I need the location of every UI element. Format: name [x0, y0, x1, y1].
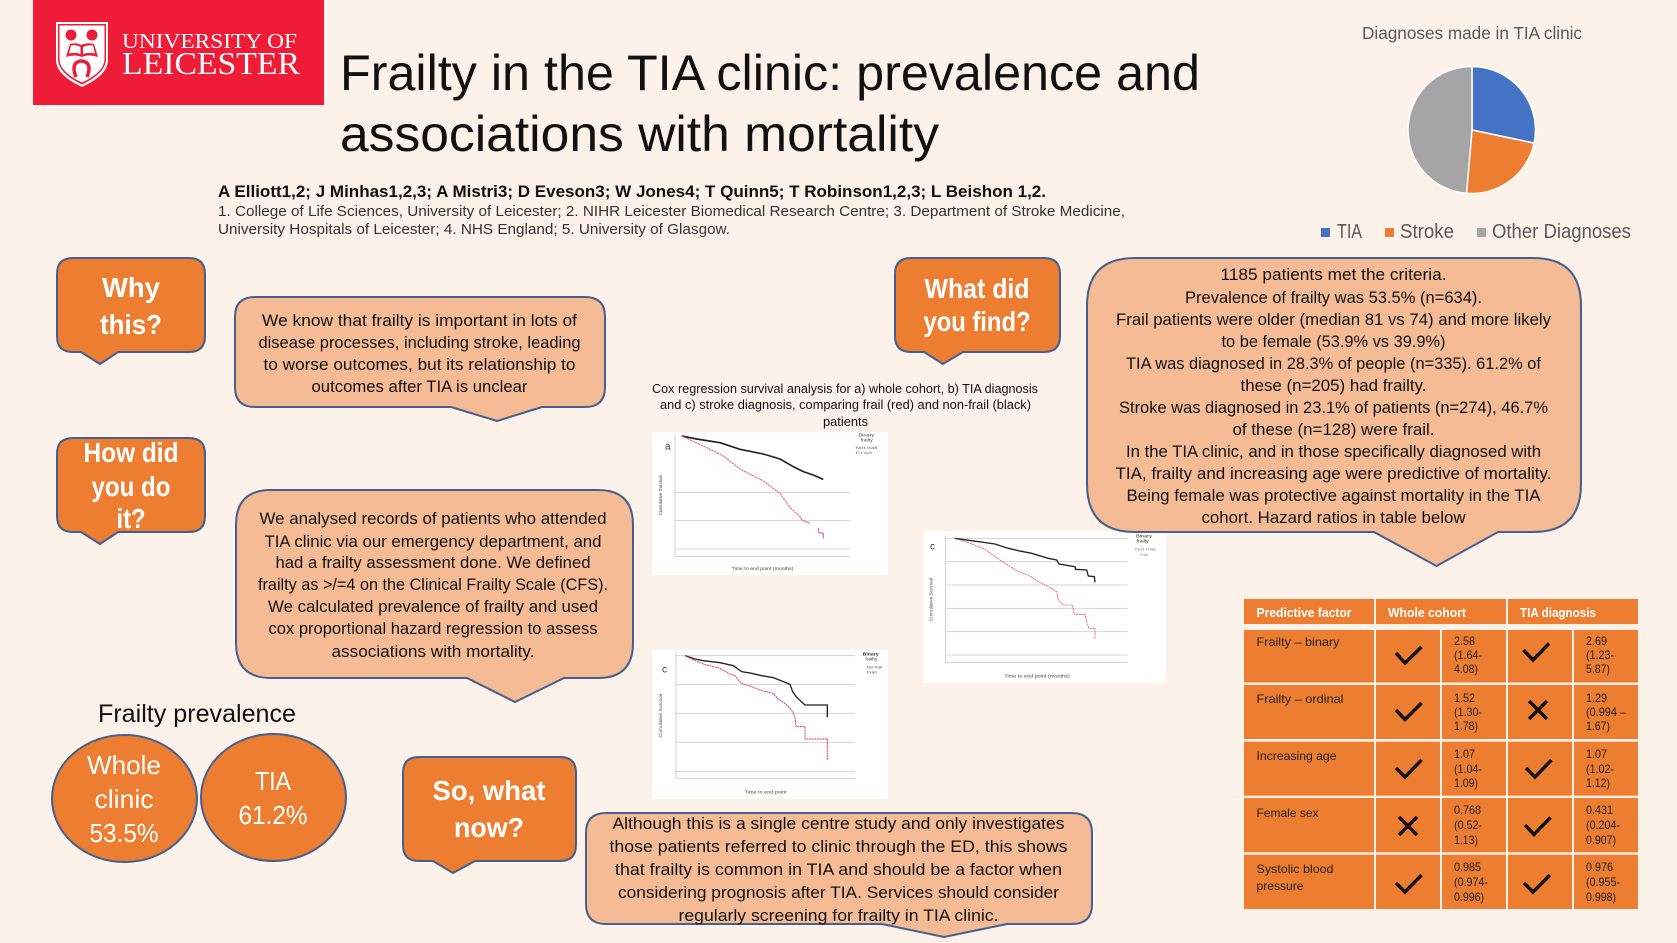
chart caption: Cox regression survival analysis for a) whole cohort, b) TIA diagnosis — [652, 381, 1038, 396]
survival chart a: whole cohort: Frail — [855, 450, 872, 455]
survival chart b: TIA diagnosis: Time to end point (months) — [1004, 673, 1070, 678]
callout heading: so what now — [403, 757, 576, 873]
survival chart a: whole cohort: frailty — [861, 438, 874, 443]
callout heading: how did you do it: you do — [92, 471, 170, 502]
authors and affiliations: A Elliott1,2; J Minhas1,2,3; A Mistri3; D Eveson3; W Jones4; T Quinn5; T Robinson1,2,3; L Beishon 1,2. — [218, 183, 1046, 201]
callout text: conclusions: considering prognosis after TIA. Services should consider — [618, 883, 1059, 902]
survival chart a: whole cohort: Binary — [858, 433, 875, 438]
row: frailty ordinal: 1.78) — [1454, 719, 1478, 733]
chart caption: patients — [823, 414, 868, 429]
pie chart: diagnoses made in TIA clinic: Diagnoses made in TIA clinic — [1362, 23, 1582, 43]
survival chart c: stroke diagnosis: Binary — [863, 652, 879, 657]
callout text: conclusions — [586, 813, 1092, 937]
callout heading: how did you do it — [57, 437, 205, 544]
survival chart a: whole cohort: a — [665, 441, 671, 452]
circle: whole clinic prevalence — [52, 735, 197, 862]
row: female sex — [1244, 798, 1638, 852]
survival chart a: whole cohort: Cumulative Survival — [658, 475, 663, 515]
row: frailty binary: 4.08) — [1454, 662, 1478, 676]
row: increasing age: 1.07 — [1586, 747, 1607, 761]
row: frailty binary — [1244, 630, 1638, 682]
row: increasing age: (1.02- — [1586, 762, 1614, 776]
table: hazard ratios — [1244, 599, 1638, 909]
title: Frailty in the TIA clinic: prevalence and — [340, 45, 1200, 101]
row: female sex: (0.52- — [1454, 818, 1482, 832]
row: frailty ordinal: 1.52 — [1454, 691, 1475, 705]
survival chart c: stroke diagnosis — [652, 650, 888, 799]
callout text: methods: had a frailty assessment done. We defined — [276, 553, 590, 572]
callout text: methods: frailty as >/=4 on the Clinical Frailty Scale (CFS). — [258, 575, 608, 594]
callout text: conclusions: that frailty is common in TIA and should be a factor when — [615, 860, 1062, 879]
circle: whole clinic prevalence: 53.5% — [90, 818, 158, 848]
callout text: conclusions: Although this is a single centre study and only investigates — [612, 814, 1064, 833]
title: associations with mortality — [340, 106, 939, 162]
pie chart: diagnoses made in TIA clinic — [1321, 23, 1631, 243]
row: frailty binary: (1.64- — [1454, 648, 1482, 662]
callout text: methods: TIA clinic via our emergency department, and — [264, 532, 602, 551]
row: systolic blood pressure: 0.976 — [1586, 860, 1613, 874]
callout text: results: 1185 patients met the criteria. — [1220, 265, 1446, 284]
row: systolic blood pressure: 0.998) — [1586, 890, 1616, 904]
callout text: methods: We calculated prevalence of frailty and used — [268, 597, 598, 616]
callout heading: so what now: So, what — [432, 775, 546, 806]
row: frailty ordinal: Frailty – ordinal — [1256, 692, 1344, 706]
callout heading: what did you find: What did — [924, 273, 1030, 304]
callout text: results: Being female was protective against mortality in the TIA — [1126, 486, 1541, 505]
callout heading: why this: this? — [100, 309, 162, 340]
row: female sex: 0.431 — [1586, 803, 1613, 817]
table header: TIA diagnosis — [1520, 606, 1596, 620]
callout text: results: Prevalence of frailty was 53.5% (n=634). — [1185, 288, 1482, 307]
survival chart c: stroke diagnosis: Frail — [867, 669, 877, 674]
pie chart: diagnoses made in TIA clinic: TIA — [1337, 221, 1363, 243]
callout text: results: cohort. Hazard ratios in table below — [1202, 508, 1466, 527]
row: frailty binary: Frailty – binary — [1256, 635, 1340, 649]
callout heading: what did you find: you find? — [924, 306, 1030, 337]
row: systolic blood pressure: (0.955- — [1586, 875, 1620, 889]
pie chart: diagnoses made in TIA clinic: Other Diagnoses — [1492, 221, 1631, 243]
row: frailty binary: 5.87) — [1586, 662, 1610, 676]
row: female sex: 0.768 — [1454, 803, 1481, 817]
row: systolic blood pressure — [1244, 855, 1638, 909]
title — [340, 45, 1200, 162]
table header: Whole cohort — [1388, 606, 1467, 620]
row: frailty binary: 2.69 — [1586, 634, 1607, 648]
callout text: results: In the TIA clinic, and in those specifically diagnosed with — [1126, 442, 1541, 461]
survival chart c: stroke diagnosis: c — [662, 665, 667, 676]
row: female sex: (0.204- — [1586, 818, 1620, 832]
row: female sex: 0.907) — [1586, 833, 1616, 847]
survival chart b: TIA diagnosis: c — [930, 541, 935, 552]
callout heading: how did you do it: it? — [116, 503, 146, 534]
logo: University of Leicester: LEICESTER — [122, 45, 301, 81]
authors and affiliations — [218, 183, 1125, 238]
chart caption: and c) stroke diagnosis, comparing frail (red) and non-frail (black) — [660, 397, 1031, 412]
chart caption — [652, 381, 1038, 429]
callout text: results: of these (n=128) were frail. — [1232, 420, 1434, 439]
row: frailty ordinal: (1.30- — [1454, 705, 1482, 719]
survival chart b: TIA diagnosis: Frail — [1140, 552, 1148, 557]
row: frailty ordinal: 1.29 — [1586, 691, 1607, 705]
survival chart c: stroke diagnosis: Cumulative Survival — [658, 694, 663, 737]
row: increasing age — [1244, 742, 1638, 796]
callout text: results: Stroke was diagnosed in 23.1% of patients (n=274), 46.7% — [1119, 398, 1548, 417]
row: frailty binary: 2.58 — [1454, 634, 1475, 648]
callout text: background: disease processes, including stroke, leading — [258, 333, 580, 352]
survival chart a: whole cohort: Not frail — [855, 445, 878, 450]
row: increasing age: Increasing age — [1256, 749, 1337, 763]
row: increasing age: 1.12) — [1586, 776, 1610, 790]
callout text: background: We know that frailty is important in lots of — [262, 311, 577, 330]
callout text: background: to worse outcomes, but its relationship to — [264, 355, 576, 374]
survival chart a: whole cohort: Time to end point (months) — [732, 566, 794, 571]
row: increasing age: 1.09) — [1454, 776, 1478, 790]
survival chart b: TIA diagnosis: Cumulative Survival — [928, 578, 933, 621]
callout text: results: to be female (53.9% vs 39.9%) — [1222, 332, 1446, 351]
callout text: results: TIA, frailty and increasing age were predictive of mortality. — [1116, 464, 1552, 483]
logo: University of Leicester: UNIVERSITY OF — [122, 29, 297, 53]
row: systolic blood pressure: 0.985 — [1454, 860, 1481, 874]
callout text: conclusions: those patients referred to clinic through the ED, this shows — [610, 837, 1068, 856]
callout text: methods: cox proportional hazard regression to assess — [268, 619, 598, 638]
callout heading: what did you find — [895, 258, 1060, 364]
callout text: conclusions: regularly screening for frailty in TIA clinic. — [678, 906, 998, 925]
logo: University of Leicester — [33, 0, 324, 105]
row: increasing age: (1.04- — [1454, 762, 1482, 776]
survival chart c: stroke diagnosis: frailty — [865, 657, 878, 662]
row: frailty ordinal — [1244, 685, 1638, 739]
callout heading: how did you do it: How did — [84, 437, 178, 468]
pie chart: diagnoses made in TIA clinic: Stroke — [1400, 221, 1454, 243]
survival chart b: TIA diagnosis: Binary — [1136, 534, 1153, 539]
callout text: results: Frail patients were older (median 81 vs 74) and more likely — [1116, 310, 1551, 329]
authors and affiliations: University Hospitals of Leicester; 4. NHS England; 5. University of Glasgow. — [218, 221, 730, 238]
circle: TIA prevalence: TIA — [255, 766, 292, 796]
callout heading: why this: Why — [102, 272, 160, 303]
heading: frailty prevalence: Frailty prevalence — [98, 700, 296, 728]
survival chart b: TIA diagnosis — [923, 531, 1166, 683]
table header — [1244, 599, 1638, 624]
row: increasing age: 1.07 — [1454, 747, 1475, 761]
row: female sex: 1.13) — [1454, 833, 1478, 847]
callout text: results: these (n=205) had frailty. — [1240, 376, 1426, 395]
row: frailty ordinal: (0.994 – — [1586, 705, 1626, 719]
callout text: background: outcomes after TIA is unclear — [312, 377, 528, 396]
callout text: background — [235, 297, 605, 421]
survival chart b: TIA diagnosis: frailty — [1137, 539, 1150, 544]
callout text: results: TIA was diagnosed in 28.3% of people (n=335). 61.2% of — [1126, 354, 1541, 373]
survival chart c: stroke diagnosis: Time to end point — [745, 789, 787, 794]
row: frailty binary: (1.23- — [1586, 648, 1614, 662]
circle: whole clinic prevalence: Whole — [87, 750, 161, 780]
authors and affiliations: 1. College of Life Sciences, University of Leicester; 2. NIHR Leicester Biomedical Research Centre; 3. Department of Stroke Medicine, — [218, 203, 1125, 220]
circle: TIA prevalence: 61.2% — [238, 800, 308, 830]
row: female sex: Female sex — [1256, 806, 1318, 820]
row: systolic blood pressure: pressure — [1256, 879, 1304, 893]
row: systolic blood pressure: (0.974- — [1454, 875, 1488, 889]
callout heading: why this — [57, 258, 205, 364]
row: systolic blood pressure: Systolic blood — [1256, 862, 1334, 876]
circle: TIA prevalence — [201, 734, 346, 861]
survival chart b: TIA diagnosis: Not frail — [1135, 547, 1156, 552]
circle: whole clinic prevalence: clinic — [94, 784, 154, 814]
table header: Predictive factor — [1256, 606, 1352, 620]
survival chart c: stroke diagnosis: Not frail — [867, 664, 882, 669]
callout text: methods — [236, 490, 633, 702]
row: systolic blood pressure: 0.996) — [1454, 890, 1484, 904]
callout heading: so what now: now? — [454, 812, 524, 843]
row: frailty ordinal: 1.67) — [1586, 719, 1610, 733]
survival chart a: whole cohort — [652, 432, 888, 575]
callout text: methods: We analysed records of patients who attended — [260, 509, 606, 528]
callout text: results — [1087, 258, 1581, 566]
callout text: methods: associations with mortality. — [332, 642, 534, 661]
